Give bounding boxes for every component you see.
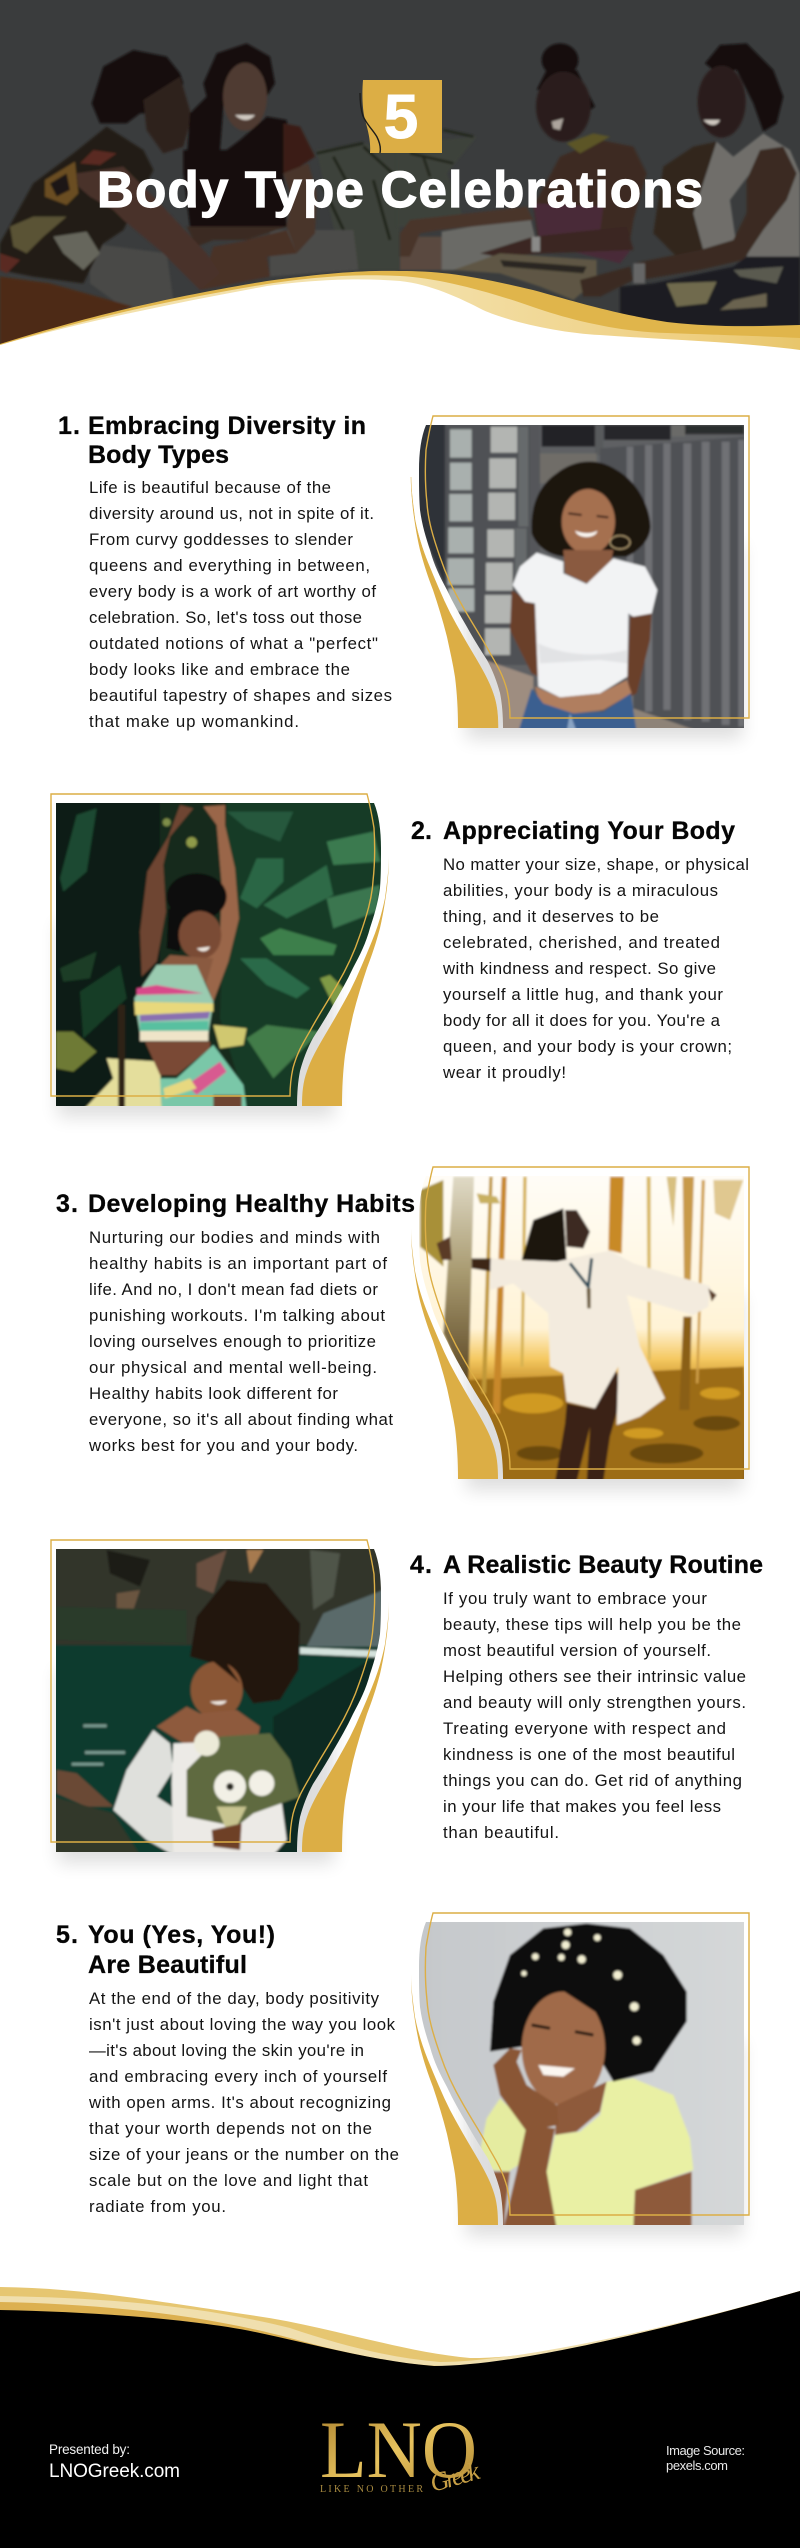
image 1 bbox=[411, 416, 750, 739]
body text 5 bbox=[88, 1989, 399, 2216]
body text 3: punishing workouts. I'm talking about bbox=[89, 1306, 385, 1325]
heading 1: 1. bbox=[58, 412, 80, 440]
heading 5 bbox=[56, 1921, 275, 1979]
body text 5: At the end of the day, body positivity bbox=[89, 1989, 380, 2008]
presented by: Presented by: bbox=[49, 2442, 130, 2457]
section 1 bbox=[58, 412, 750, 739]
body text 4: than beautiful. bbox=[443, 1823, 559, 1842]
body text 2: with kindness and respect. So give bbox=[442, 959, 716, 978]
header photo: four women laughing bbox=[0, 0, 800, 360]
body text 5: scale but on the love and light that bbox=[89, 2171, 368, 2190]
heading 5: Are Beautiful bbox=[88, 1951, 247, 1979]
heading 3: 3. bbox=[56, 1190, 78, 1218]
image 4 bbox=[50, 1540, 389, 1863]
heading 1: Body Types bbox=[88, 441, 229, 469]
body text 5: radiate from you. bbox=[89, 2197, 226, 2216]
footer bbox=[0, 2287, 800, 2548]
heading 2: Appreciating Your Body bbox=[443, 817, 735, 845]
heading 1: Embracing Diversity in bbox=[88, 412, 366, 440]
body text 2: celebrated, cherished, and treated bbox=[443, 933, 720, 952]
body text 4: most beautiful version of yourself. bbox=[443, 1641, 711, 1660]
body text 1: celebration. So, let's toss out those bbox=[89, 608, 362, 627]
logo: LNO bbox=[320, 2404, 477, 2495]
heading 2: 2. bbox=[411, 817, 432, 845]
body text 2: thing, and it deserves to be bbox=[443, 907, 659, 926]
body text 2: abilities, your body is a miraculous bbox=[443, 881, 718, 900]
photo: smiling woman with flowers in her hair bbox=[413, 1918, 750, 2228]
section 4 bbox=[50, 1540, 763, 1863]
image source bbox=[666, 2443, 745, 2473]
body text 5: and embracing every inch of yourself bbox=[89, 2067, 387, 2086]
body text 5: size of your jeans or the number on the bbox=[89, 2145, 399, 2164]
title: Body Type Celebrations bbox=[97, 161, 703, 218]
logo: LIKE NO OTHER bbox=[320, 2484, 423, 2495]
body text 3: works best for you and your body. bbox=[88, 1436, 358, 1455]
body text 4: beauty, these tips will help you be the bbox=[443, 1615, 741, 1634]
image 3 bbox=[411, 1167, 750, 1490]
heading 1 bbox=[58, 412, 366, 469]
body text 4: Helping others see their intrinsic value bbox=[443, 1667, 746, 1686]
wave: gold layers and white curve bbox=[0, 271, 800, 380]
body text 3: loving ourselves enough to prioritize bbox=[89, 1332, 376, 1351]
body text 1: body looks like and embrace the bbox=[89, 660, 350, 679]
heading 5: You (Yes, You!) bbox=[88, 1921, 275, 1949]
body text 2: yourself a little hug, and thank your bbox=[443, 985, 723, 1004]
photo: bride with bouquet by a lake bbox=[50, 1543, 387, 1857]
body text 5: with open arms. It's about recognizing bbox=[88, 2093, 391, 2112]
body text 3: healthy habits is an important part of bbox=[89, 1254, 387, 1273]
body text 3: our physical and mental well-being. bbox=[89, 1358, 377, 1377]
image source: Image Source: bbox=[666, 2443, 745, 2458]
presented by bbox=[49, 2442, 180, 2482]
body text 1: diversity around us, not in spite of it. bbox=[89, 504, 374, 523]
body text 3: Nurturing our bodies and minds with bbox=[89, 1228, 380, 1247]
body text 1: queens and everything in between, bbox=[89, 556, 370, 575]
body text 1: outdated notions of what a "perfect" bbox=[89, 634, 378, 653]
body text 2: wear it proudly! bbox=[442, 1063, 566, 1082]
presented by: LNOGreek.com bbox=[49, 2461, 180, 2482]
body text 3: everyone, so it's all about finding what bbox=[89, 1410, 393, 1429]
photo: woman with raised arms among ferns bbox=[50, 798, 387, 1112]
badge: number 5: 5 bbox=[384, 83, 418, 152]
footer wave and black band bbox=[0, 2287, 800, 2548]
body text 1: From curvy goddesses to slender bbox=[89, 530, 353, 549]
body text 1: Life is beautiful because of the bbox=[89, 478, 331, 497]
body text 4: and beauty will only strengthen yours. bbox=[443, 1693, 746, 1712]
image 5 bbox=[411, 1913, 750, 2236]
body text 5: that your worth depends not on the bbox=[89, 2119, 372, 2138]
heading 4: 4. bbox=[410, 1551, 432, 1579]
body text 3: life. And no, I don't mean fad diets or bbox=[89, 1280, 378, 1299]
body text 1: beautiful tapestry of shapes and sizes bbox=[89, 686, 392, 705]
heading 4: A Realistic Beauty Routine bbox=[443, 1551, 763, 1579]
body text 4 bbox=[443, 1589, 746, 1842]
body text 1: that make up womankind. bbox=[89, 712, 299, 731]
header bbox=[0, 0, 800, 380]
section 3 bbox=[56, 1167, 750, 1490]
body text 5: —it's about loving the skin you're in bbox=[89, 2041, 364, 2060]
section 5 bbox=[56, 1913, 750, 2236]
logo: Greek bbox=[427, 2456, 483, 2498]
image source: pexels.com bbox=[666, 2458, 728, 2473]
badge: number 5 bbox=[360, 80, 442, 153]
body text 2: body for all it does for you. You're a bbox=[443, 1011, 721, 1030]
heading 3: Developing Healthy Habits bbox=[88, 1190, 415, 1218]
body text 5: isn't just about loving the way you look bbox=[89, 2015, 396, 2034]
heading 5: 5. bbox=[56, 1921, 78, 1949]
body text 2 bbox=[442, 855, 749, 1082]
body text 4: kindness is one of the most beautiful bbox=[443, 1745, 735, 1764]
body text 1: every body is a work of art worthy of bbox=[89, 582, 376, 601]
body text 2: No matter your size, shape, or physical bbox=[443, 855, 749, 874]
body text 4: things you can do. Get rid of anything bbox=[443, 1771, 742, 1790]
photo: woman with open arms in sunlit forest bbox=[413, 1173, 750, 1483]
body text 1 bbox=[89, 478, 392, 731]
body text 4: If you truly want to embrace your bbox=[443, 1589, 707, 1608]
body text 4: in your life that makes you feel less bbox=[443, 1797, 721, 1816]
body text 4: Treating everyone with respect and bbox=[443, 1719, 726, 1738]
photo: smiling woman in white tee bbox=[413, 422, 750, 735]
body text 3: Healthy habits look different for bbox=[89, 1384, 338, 1403]
body text 3 bbox=[88, 1228, 393, 1455]
section 2 bbox=[50, 794, 749, 1117]
body text 2: queen, and your body is your crown; bbox=[443, 1037, 732, 1056]
image 2 bbox=[50, 794, 389, 1117]
